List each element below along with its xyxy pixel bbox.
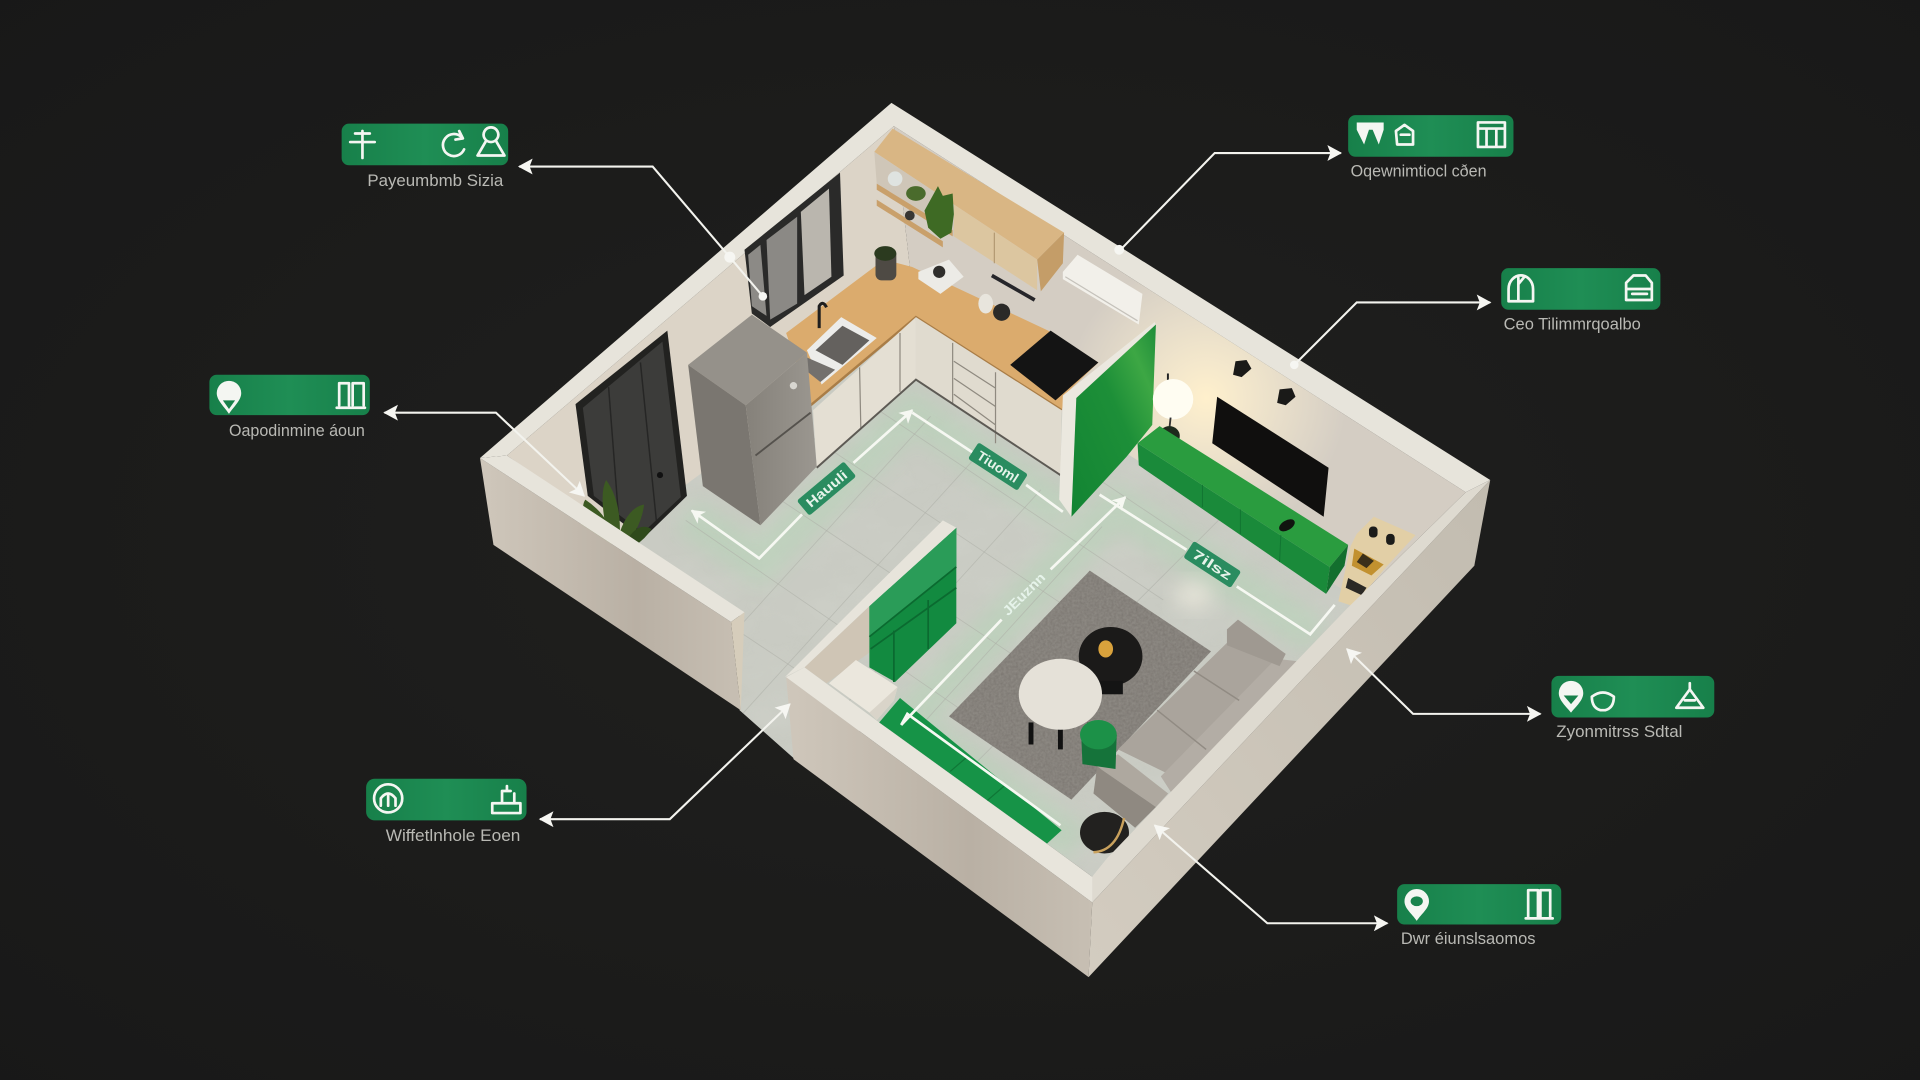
countertop: [786, 260, 1098, 410]
label: Oapodinmine áoun: [229, 421, 365, 440]
corner shelf unit: [1338, 517, 1416, 606]
sink: [807, 303, 877, 384]
leader line: [1155, 825, 1387, 923]
leader line: [1347, 649, 1540, 714]
callout 3: upper right: [1290, 268, 1660, 369]
callout 6: bottom left: [366, 704, 790, 845]
green chip with icons: [1348, 115, 1513, 157]
window: [744, 173, 844, 327]
label: Wiffetlnhole Eoen: [386, 826, 520, 845]
green chip with icons: [209, 375, 370, 415]
label: Payeumbmb Sizia: [367, 171, 504, 190]
callout 5: lower right: [1347, 649, 1714, 741]
isometric apartment model: [480, 103, 1490, 977]
green partition wall: [1059, 322, 1156, 517]
rug: [949, 571, 1211, 800]
left front wall: [480, 456, 744, 710]
floor tag: living width: 7ilsz: [1189, 547, 1235, 583]
green chip with icons: [342, 124, 508, 165]
floor tag: living depth: JEuznn: [1000, 570, 1048, 619]
green chip with icons: [1501, 268, 1660, 310]
entry door: [576, 331, 687, 539]
lower front wall: [786, 667, 1124, 977]
green chip with icons: [1551, 676, 1714, 718]
base cabinets: [813, 317, 1062, 475]
green shelving: [785, 520, 956, 683]
upper shelves and cabinet: [874, 129, 1064, 291]
white cube and green bench: [829, 660, 1062, 844]
floor tag: living width: [1183, 541, 1241, 588]
leader line: [1114, 153, 1341, 255]
floor tag: kitchen width: Hauuli: [803, 467, 850, 510]
floor dimension arrows: [692, 410, 1335, 825]
label: Ceo Tilimmrqoalbo: [1504, 314, 1641, 333]
right wall: [1089, 480, 1490, 977]
potted plant: [576, 480, 651, 549]
leader line: [519, 167, 767, 301]
refrigerator: [688, 315, 817, 525]
leader line: [540, 704, 790, 819]
callout 4: mid left: [209, 375, 584, 496]
callout 1: top left: [342, 124, 767, 301]
back walls: [480, 103, 1490, 609]
counter items: [874, 246, 1035, 321]
callout 7: bottom right: [1155, 825, 1561, 948]
leader line: [1290, 302, 1490, 369]
corner accent chair: [1080, 812, 1129, 853]
green chip with icons: [366, 779, 527, 820]
label: Dwr éiunslsaomos: [1401, 929, 1536, 948]
kitchen: [688, 129, 1142, 525]
floor tag: kitchen width: [797, 461, 856, 516]
coffee tables and stool: [1019, 627, 1142, 769]
label: Zyonmitrss Sdtal: [1556, 722, 1682, 741]
front walls: [480, 456, 1490, 977]
sofa: [1093, 620, 1298, 828]
green TV console: [1138, 426, 1348, 594]
callout 2: top right: [1114, 115, 1513, 255]
leader line: [384, 413, 584, 496]
green chip with icons: [1397, 884, 1561, 924]
label: Oqewnimtiocl cðen: [1351, 161, 1487, 180]
cooktop: [1010, 331, 1098, 400]
floor with tiles: [612, 318, 1371, 882]
floor tag: kitchen depth: [968, 442, 1028, 491]
floor tag: kitchen depth: Tiuoml: [974, 448, 1021, 486]
air conditioner: [1063, 255, 1142, 324]
TV wall: lamp, spotlights, television: [1153, 360, 1329, 517]
